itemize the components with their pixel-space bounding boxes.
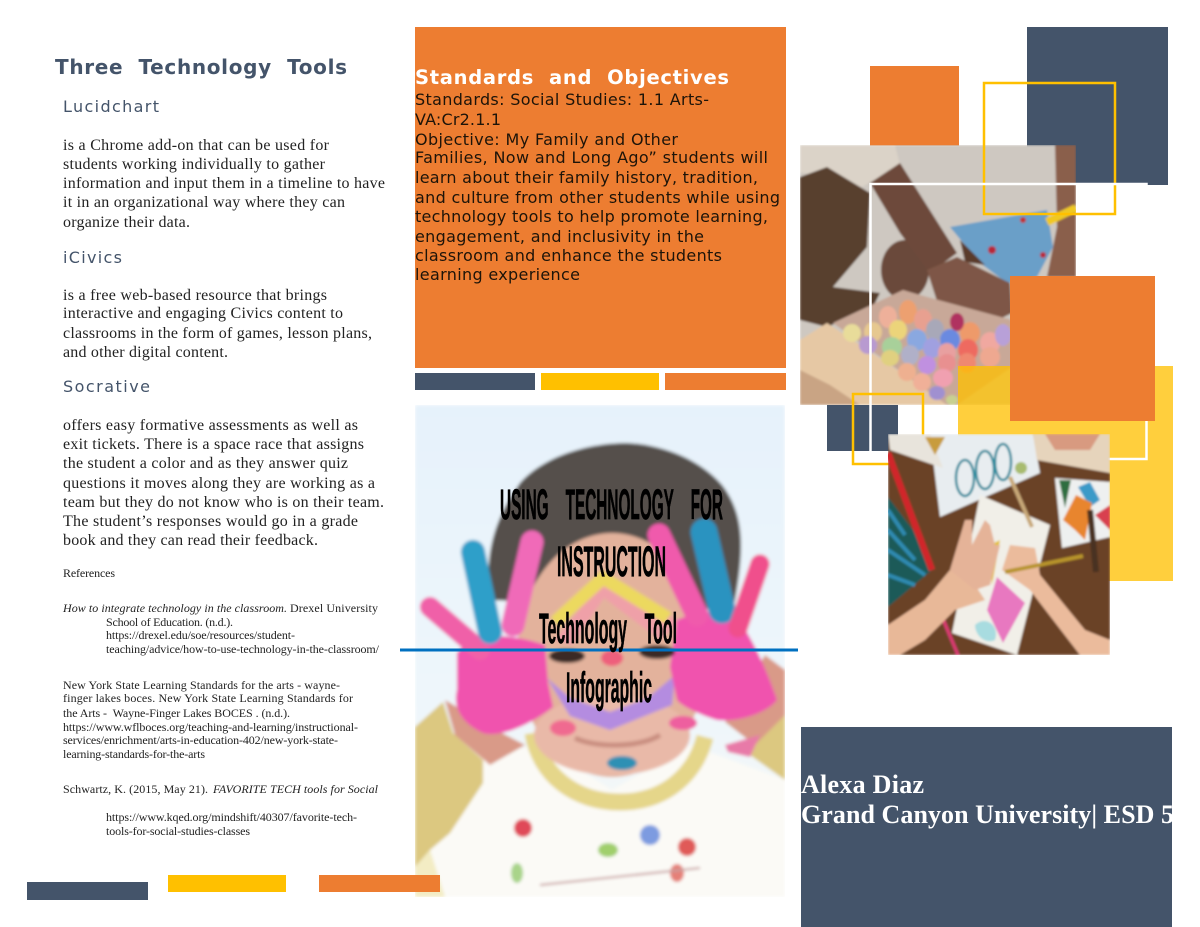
outline: white square [870,184,1146,459]
text block: standards and objective body [415,90,780,284]
text block: standards and objective body: VA:Cr2.1.1 [415,110,501,129]
tool: iCivics: interactive and engaging Civics content to [63,305,343,322]
panel: author details [801,727,1174,927]
text block: references: the Arts - Wayne-Finger Lakes BOCES . (n.d.). [63,706,290,720]
text block: standards and objective body: learning experience [415,265,580,284]
outline: yellow square lower [853,394,923,464]
text block: references: Schwartz, K. (2015, May 21). [63,782,208,796]
tool: Lucidchart: information and input them in a timeline to have [63,175,385,192]
text block: references: https://www.kqed.org/mindshift/40307/favorite-tech- [106,810,357,824]
text block: standards and objective body: engagement, and inclusivity in the [415,227,704,246]
square: orange large [1010,276,1155,421]
text block: references: Drexel University [290,601,378,615]
title: using technology for instruction [500,481,723,712]
tool: Socrative: questions it moves along they are working as a [63,475,375,492]
tool: Socrative: book and they can read their feedback. [63,532,318,549]
text block: references: https://drexel.edu/soe/resources/student- [106,628,295,642]
tool: Lucidchart: it in an organizational way where they can [63,194,345,211]
text block: references [62,566,380,838]
panel: three technology tools [55,55,385,549]
photo: child's hands with chalk [800,145,1076,405]
tool: Socrative: The student’s responses would go in a grade [63,513,358,530]
outline: yellow square upper [984,83,1115,214]
square: navy large [1027,27,1168,185]
text block: standards and objective body: Families, Now and Long Ago” students will [415,148,768,167]
text block: standards and objective body: technology tools to help promote learning, [415,207,768,226]
tool: Socrative: team but they do not know who is on their team. [63,494,384,511]
text block: standards and objective body: learn about their family history, tradition, [415,168,758,187]
heading: three technology tools: Three Technology Tools [55,55,347,79]
text block: references: How to integrate technology in the classroom. [62,601,287,615]
square: navy small [827,405,898,451]
text block: references: learning-standards-for-the-arts [63,747,205,761]
panel: standards and objectives [415,27,786,368]
title: using technology for instruction: Infographic [566,664,652,712]
square: orange small [870,66,959,146]
tool: Lucidchart [63,97,385,231]
divider line across photo [400,648,798,652]
accent bars under standards panel [415,373,786,390]
text block: references: References [63,566,115,580]
photo: children colouring on wooden table [888,434,1110,655]
photo: child with painted hands [415,405,785,897]
text block: standards and objective body: classroom and enhance the students [415,246,722,265]
tool: iCivics: is a free web-based resource that brings [63,287,327,304]
tool: iCivics [63,248,372,361]
tool: Socrative: Socrative [63,377,150,396]
tool: Lucidchart: students working individually to gather [63,156,326,173]
text block: references: New York State Learning Standards for the arts - wayne- [63,678,340,692]
tool: Socrative [63,377,384,549]
text block: references: tools-for-social-studies-classes [106,824,250,838]
text block: references: https://www.wflboces.org/teaching-and-learning/instructional- [63,720,358,734]
tool: Socrative: the student a color and as they answer quiz [63,455,348,472]
title: using technology for instruction: INSTRUCTION [557,538,666,586]
text: author name: Alexa Diaz [801,770,924,799]
tool: iCivics: classrooms in the form of games, lesson plans, [63,325,372,342]
tool: Socrative: exit tickets. There is a space race that assigns [63,436,364,453]
square: light yellow [958,366,1173,581]
text block: references: teaching/advice/how-to-use-technology-in-the-classroom/ [106,642,380,656]
tool: Lucidchart: Lucidchart [63,97,159,116]
text block: references: School of Education. (n.d.). [106,615,233,629]
tool: iCivics: iCivics [63,248,122,267]
text block: references: FAVORITE TECH tools for Social [212,782,379,796]
tool: Lucidchart: is a Chrome add-on that can be used for [63,137,330,154]
text block: references: finger lakes boces. New York State Learning Standards for [63,691,353,705]
text: USING TECHNOLOGY FOR [500,481,723,529]
text block: standards and objective body: and culture from other students while using [415,188,780,207]
text block: standards and objective body: Standards: Social Studies: 1.1 Arts- [415,90,709,109]
bottom accent bars [27,875,440,900]
text: university and course: Grand Canyon University| ESD 5 [801,800,1174,829]
text block: references: services/enrichment/arts-in-education-402/new-york-state- [63,733,338,747]
text block: standards and objective body: Objective: My Family and Other [415,130,678,149]
tool: Socrative: offers easy formative assessments as well as [63,417,358,434]
heading: standards and objectives: Standards and Objectives [415,66,729,89]
tool: Lucidchart: organize their data. [63,214,190,231]
text: Technology Tool [539,605,677,653]
tool: iCivics: and other digital content. [63,344,228,361]
decorative collage: squares and photos [800,27,1173,655]
